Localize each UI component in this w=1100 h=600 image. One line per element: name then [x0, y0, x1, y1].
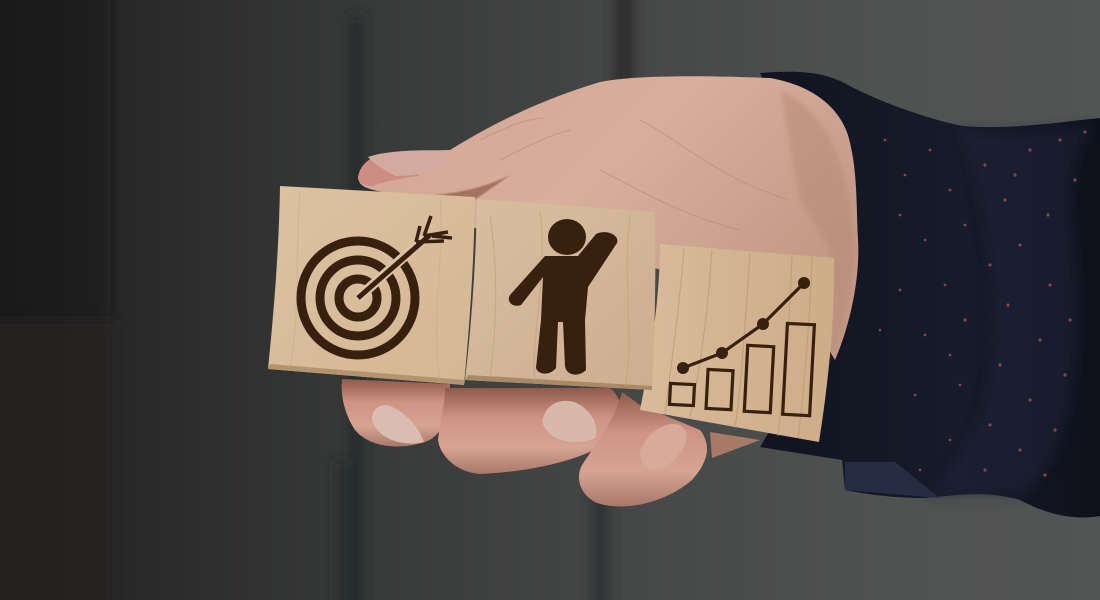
block: target with arrow	[268, 186, 475, 385]
icon: target rings	[301, 241, 415, 355]
shirt sleeve	[760, 72, 1100, 517]
block: growth chart	[640, 244, 834, 442]
ring finger	[579, 392, 707, 506]
icon: person	[509, 219, 617, 375]
shirt dot pattern	[879, 130, 1087, 477]
back of the hand and thumb	[358, 76, 858, 360]
index finger	[342, 379, 450, 446]
middle finger	[438, 388, 622, 474]
fingers below the blocks	[342, 379, 760, 506]
icon: chart bars and rising line	[669, 277, 814, 416]
icon: arrow	[358, 216, 452, 298]
block: person with raised arm	[465, 199, 655, 390]
